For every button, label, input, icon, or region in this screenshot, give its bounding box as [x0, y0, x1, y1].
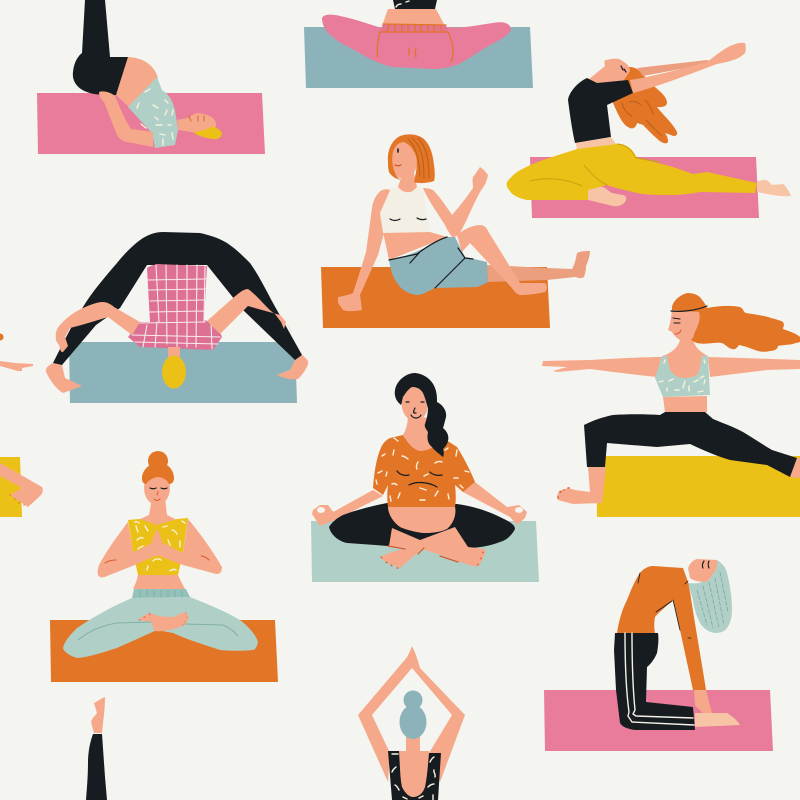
mint hair	[688, 560, 732, 633]
top sprinkles	[392, 754, 435, 800]
long black hair	[395, 373, 448, 457]
yellow trousers	[507, 144, 757, 200]
top marks	[390, 218, 426, 220]
top sprinkles	[659, 360, 705, 392]
hair	[142, 464, 174, 484]
teal shorts	[389, 237, 488, 295]
teal mat left	[69, 342, 297, 403]
raised arms	[358, 646, 465, 782]
midriff	[663, 396, 707, 412]
trouser fold lines	[78, 622, 238, 640]
yellow mat right	[596, 456, 800, 517]
face marks	[189, 116, 204, 121]
figure: prayer pose lotus on orange mat	[50, 451, 278, 682]
headband	[671, 306, 707, 311]
far leg	[487, 251, 590, 282]
mint shirt	[128, 77, 178, 148]
black trackpants	[614, 633, 695, 730]
left arm	[98, 522, 157, 577]
figure: warrior pose with red hair on yellow mat	[542, 293, 800, 517]
mouth	[395, 164, 401, 167]
facial features	[397, 149, 399, 152]
near leg	[457, 225, 547, 295]
pink mat top right	[530, 157, 759, 218]
midriff	[133, 575, 185, 589]
mint mat	[311, 521, 539, 582]
blonde hair	[193, 126, 222, 139]
right arm	[207, 289, 292, 334]
mudra finger hole right	[515, 507, 523, 513]
face	[402, 385, 428, 421]
blouse marks	[397, 471, 442, 487]
mint trousers	[63, 597, 258, 658]
toes	[10, 495, 24, 505]
pink mat lower right	[544, 690, 773, 751]
black leggings	[53, 232, 302, 365]
flowing hair	[613, 67, 677, 143]
pink plaid shirt	[128, 264, 222, 350]
hair strands	[408, 138, 429, 178]
face	[668, 310, 700, 341]
neck	[398, 173, 417, 193]
head	[177, 113, 216, 134]
left arm and hand	[338, 189, 391, 311]
figure: seated from behind arms raised, bottom	[358, 646, 465, 800]
blouse sprinkles	[376, 438, 469, 501]
waistband	[132, 589, 190, 598]
mint sports top	[655, 356, 710, 397]
figure: raised leg at bottom left	[86, 697, 107, 800]
right arm and mudra hand	[463, 482, 527, 525]
facial features	[406, 402, 424, 418]
face	[144, 471, 170, 505]
closed eyes and smile	[150, 487, 167, 490]
black leggings	[584, 412, 797, 477]
figure: backbend with red hair on pink mat	[507, 43, 791, 218]
prayer hands	[150, 529, 164, 557]
smile	[675, 330, 681, 334]
shin and foot	[557, 467, 606, 504]
folded foot	[588, 187, 626, 206]
neck	[168, 347, 180, 357]
belly	[116, 57, 158, 108]
figure: shoulder stand on pink mat	[37, 0, 265, 154]
teal mat top	[304, 27, 533, 88]
crossed shins and feet	[380, 527, 485, 568]
torso	[383, 232, 447, 260]
figure: pregnant woman in lotus on mint mat	[311, 373, 539, 582]
foot	[0, 463, 43, 507]
trouser fold lines	[530, 144, 660, 186]
chest and neck	[662, 335, 708, 385]
face	[688, 559, 717, 582]
orange blouse	[373, 435, 475, 507]
neck	[138, 498, 177, 528]
top sprinkles	[396, 1, 409, 7]
hair strands	[622, 100, 662, 136]
orange top	[617, 566, 706, 690]
flowing hair	[672, 293, 800, 352]
neck	[406, 736, 420, 753]
arm line	[638, 573, 691, 638]
black leggings raised	[73, 0, 128, 95]
figure: twisted sitting woman on orange mat	[321, 134, 590, 328]
eye marks	[621, 66, 626, 72]
left arm and mudra hand	[312, 490, 383, 526]
hair fragment left edge	[0, 334, 4, 340]
bob hair	[388, 134, 435, 183]
right foot	[277, 355, 308, 379]
crossed feet	[138, 612, 188, 631]
foot	[695, 713, 740, 727]
black shirt	[568, 78, 633, 143]
belly	[388, 507, 455, 533]
waistband ribs	[140, 590, 182, 597]
pink mat top left	[37, 93, 265, 154]
left arm	[56, 302, 140, 352]
face	[390, 137, 418, 179]
closed eye and smile	[673, 318, 680, 323]
foot	[91, 697, 105, 733]
mudra finger holes	[317, 507, 325, 513]
black tank top	[388, 751, 441, 800]
figure: seated from behind on teal mat	[304, 0, 533, 88]
near arm	[630, 43, 746, 93]
black legging	[86, 734, 107, 800]
shirt sprinkles	[137, 89, 173, 145]
pink trousers	[322, 15, 511, 69]
top sprinkles	[135, 521, 185, 571]
right arm	[157, 519, 222, 574]
hair strands	[697, 572, 728, 628]
figure: wide-legged forward bend on teal mat	[0, 232, 308, 403]
yellow top	[128, 518, 188, 575]
toes	[139, 613, 187, 625]
left edge hand	[0, 361, 33, 371]
supporting arm	[99, 91, 153, 147]
mouth	[105, 492, 209, 563]
hand	[694, 690, 712, 713]
black underwear	[390, 522, 458, 541]
right arm	[708, 357, 800, 377]
yellow hair	[162, 356, 186, 388]
bare back	[382, 9, 445, 26]
skin back	[399, 751, 429, 800]
yellow mat left edge	[0, 457, 22, 517]
bun	[148, 451, 168, 471]
toes	[558, 488, 569, 498]
black leggings	[329, 503, 515, 548]
figure: camel pose on pink mat	[544, 559, 773, 751]
right foot	[757, 180, 791, 196]
teal hair	[400, 705, 426, 739]
cream top	[380, 187, 430, 233]
plaid lines	[132, 265, 220, 349]
figure: left edge foot on yellow mat	[0, 457, 43, 517]
far arm	[637, 60, 713, 76]
orange mat lower left	[50, 620, 278, 682]
left arm	[542, 357, 662, 377]
right arm and hand	[423, 167, 488, 237]
orange seams	[377, 24, 453, 62]
waistband	[380, 24, 448, 32]
midriff	[576, 137, 617, 151]
closed eyes	[702, 561, 709, 568]
teal bun	[404, 690, 422, 710]
head and neck	[588, 59, 630, 84]
trailing foot	[790, 458, 800, 478]
white stripes	[625, 633, 694, 725]
black top	[393, 0, 437, 9]
orange mat middle	[321, 267, 550, 328]
toes and creases	[381, 546, 483, 568]
shorts lines	[389, 237, 473, 288]
neck	[403, 415, 443, 451]
left foot	[46, 363, 82, 393]
